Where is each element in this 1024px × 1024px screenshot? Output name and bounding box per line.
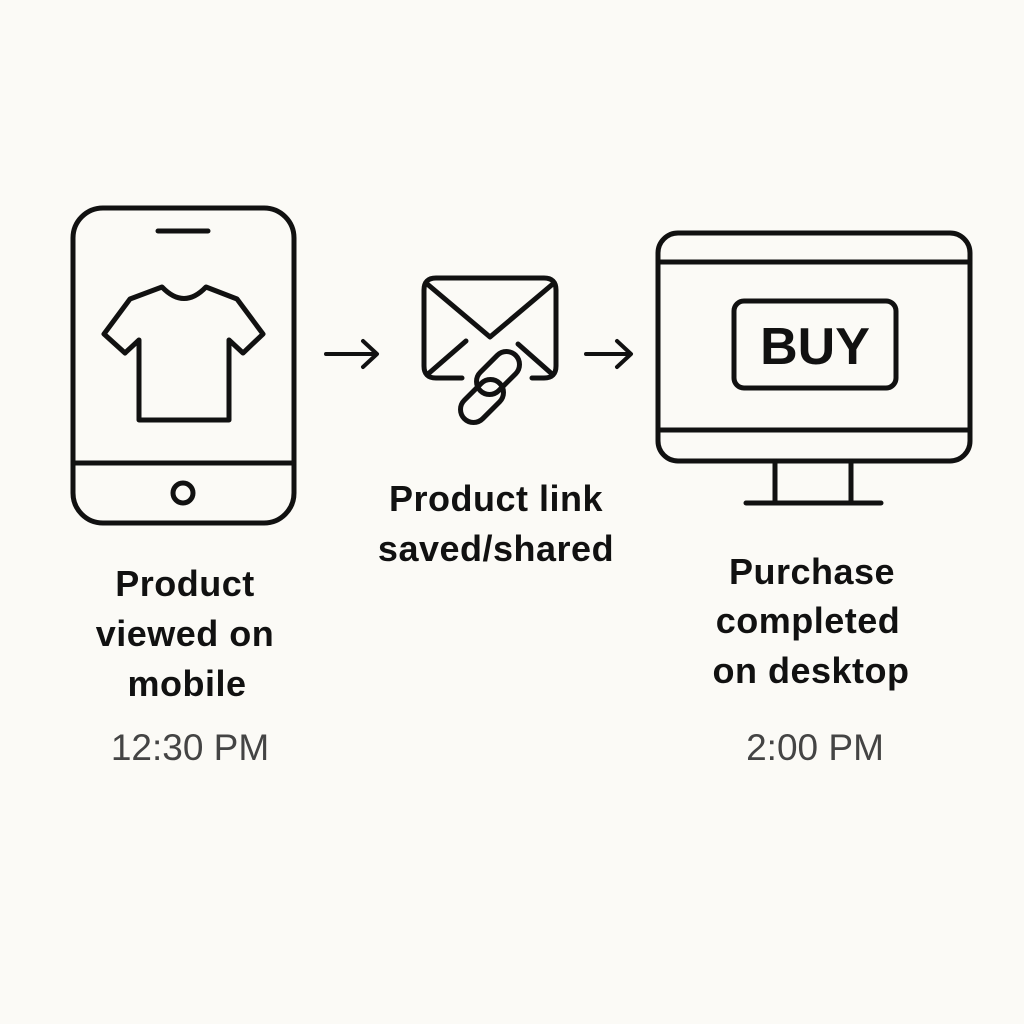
icon: desktop monitor xyxy=(658,233,970,503)
label: step 1: Product xyxy=(115,563,255,604)
button: BUY xyxy=(734,301,896,388)
arrow: phone to link xyxy=(326,341,377,367)
label: step 1: mobile xyxy=(127,663,247,704)
label: step 3: Purchase xyxy=(729,551,895,592)
icon: t-shirt xyxy=(104,287,263,420)
label: step 3: completed xyxy=(716,600,900,641)
label: step 2: saved/shared xyxy=(378,528,614,569)
arrow: link to desktop xyxy=(586,341,631,367)
icon: mobile phone xyxy=(73,208,294,523)
time: 12:30 PM: 12:30 PM xyxy=(111,727,269,768)
label: step 3: on desktop xyxy=(712,650,910,691)
icon: envelope with link xyxy=(424,278,556,428)
label: step 2: Product link xyxy=(389,478,603,519)
text: BUY xyxy=(760,318,870,376)
label: step 1: viewed on xyxy=(96,613,274,654)
time: 2:00 PM: 2:00 PM xyxy=(746,727,884,768)
